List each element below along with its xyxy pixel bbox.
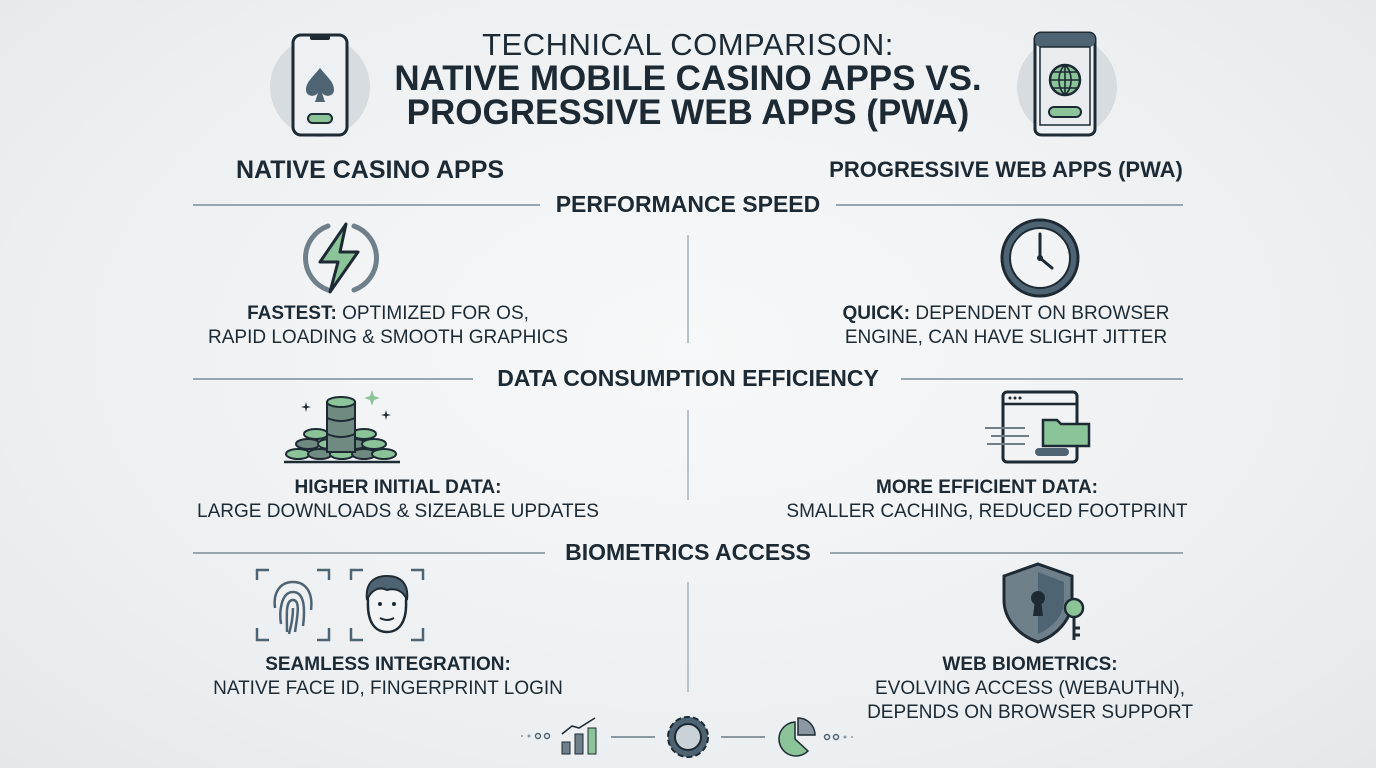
section: data: DATA CONSUMPTION EFFICIENCY — [497, 365, 879, 391]
text: seamless integration: SEAMLESS INTEGRATION: — [265, 654, 511, 675]
text: fastest: RAPID LOADING & SMOOTH GRAPHICS — [208, 327, 568, 348]
text: higher initial data: LARGE DOWNLOADS & SIZEABLE UPDATES — [197, 501, 599, 522]
text: web biometrics: DEPENDS ON BROWSER SUPPORT — [867, 702, 1193, 723]
icon: browser cache — [985, 390, 1090, 464]
text: more efficient: MORE EFFICIENT DATA: — [876, 477, 1098, 498]
icon: pwa browser phone — [1017, 32, 1117, 137]
text: seamless integration: NATIVE FACE ID, FINGERPRINT LOGIN — [213, 678, 563, 699]
icon: fingerprint and face — [256, 568, 424, 642]
text: fastest: FASTEST: OPTIMIZED FOR OS, — [247, 303, 529, 324]
icon: clock — [1000, 218, 1080, 298]
section: biometrics: BIOMETRICS ACCESS — [565, 539, 811, 565]
icon: lightning — [303, 222, 379, 294]
title: NATIVE MOBILE CASINO APPS VS. — [394, 59, 982, 98]
icon: native phone — [270, 34, 370, 137]
text: web biometrics — [867, 654, 1193, 723]
text: higher initial data — [197, 477, 599, 522]
footer icons — [521, 716, 853, 758]
heading: pwa: PROGRESSIVE WEB APPS (PWA) — [829, 157, 1183, 182]
text: quick: QUICK: DEPENDENT ON BROWSER — [843, 303, 1169, 324]
text: seamless integration — [213, 654, 563, 699]
text: quick — [843, 303, 1169, 348]
text: quick: ENGINE, CAN HAVE SLIGHT JITTER — [845, 327, 1167, 348]
title: TECHNICAL COMPARISON: — [482, 27, 894, 62]
heading: native: NATIVE CASINO APPS — [236, 156, 504, 184]
title: PROGRESSIVE WEB APPS (PWA) — [407, 93, 969, 132]
text: web biometrics: EVOLVING ACCESS (WEBAUTHN), — [875, 678, 1185, 699]
text: fastest — [208, 303, 568, 348]
text: more efficient — [786, 477, 1188, 522]
section: performance speed: PERFORMANCE SPEED — [556, 191, 820, 217]
text: more efficient: SMALLER CACHING, REDUCED FOOTPRINT — [786, 501, 1188, 522]
text: higher initial data: HIGHER INITIAL DATA: — [295, 477, 501, 498]
title — [394, 27, 982, 132]
text: web biometrics: WEB BIOMETRICS: — [942, 654, 1118, 675]
icon: shield key — [1002, 562, 1084, 644]
icon: data coin stack — [284, 390, 400, 464]
